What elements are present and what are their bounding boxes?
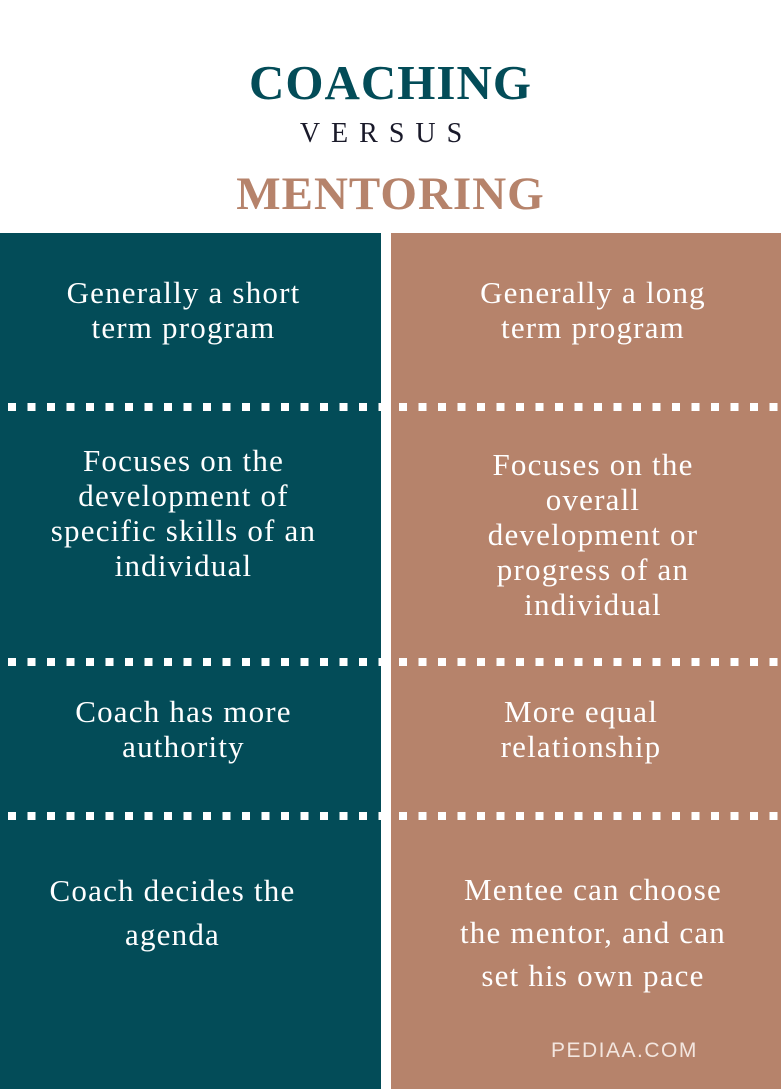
text: equal relationship: More equal (504, 694, 658, 729)
text: overall development: individual (524, 587, 662, 622)
text: agenda (50, 873, 295, 952)
text: overall development: development or (488, 517, 698, 552)
text: long term: term program (501, 310, 685, 345)
title: versus: VERSUS (300, 118, 473, 149)
text: agenda: Coach decides the (50, 873, 295, 908)
text: mentee choose: the mentor, and can (460, 915, 726, 950)
footer: pediaa logo: PEDIAA.COM (551, 1039, 698, 1062)
title: coaching: COACHING (249, 55, 532, 110)
text: equal relationship (501, 694, 661, 764)
text: specific skills: Focuses on the (83, 443, 284, 478)
text: mentee choose: set his own pace (481, 958, 705, 993)
panel: coaching column (0, 233, 381, 1089)
panel: mentoring column (391, 233, 781, 1089)
text: overall development: Focuses on the (492, 447, 694, 482)
text: long term (480, 275, 706, 345)
text: mentee choose (460, 872, 726, 993)
text: overall development (488, 447, 698, 622)
text: authority: Coach has more (75, 694, 292, 729)
text: overall development: progress of an (497, 552, 689, 587)
text: agenda: agenda (125, 917, 220, 952)
text: short term: Generally a short (67, 275, 300, 310)
text: overall development: overall (546, 482, 640, 517)
text: specific skills: individual (115, 548, 252, 583)
text: short term (67, 275, 300, 345)
text: specific skills: specific skills of an (51, 513, 316, 548)
text: short term: term program (92, 310, 275, 345)
text: equal relationship: relationship (501, 729, 661, 764)
title: mentoring: MENTORING (236, 168, 545, 220)
text: authority: authority (122, 729, 245, 764)
text: mentee choose: Mentee can choose (464, 872, 722, 907)
text: specific skills: development of (78, 478, 289, 513)
text: authority (75, 694, 292, 764)
text: specific skills (51, 443, 316, 583)
text: long term: Generally a long (480, 275, 706, 310)
